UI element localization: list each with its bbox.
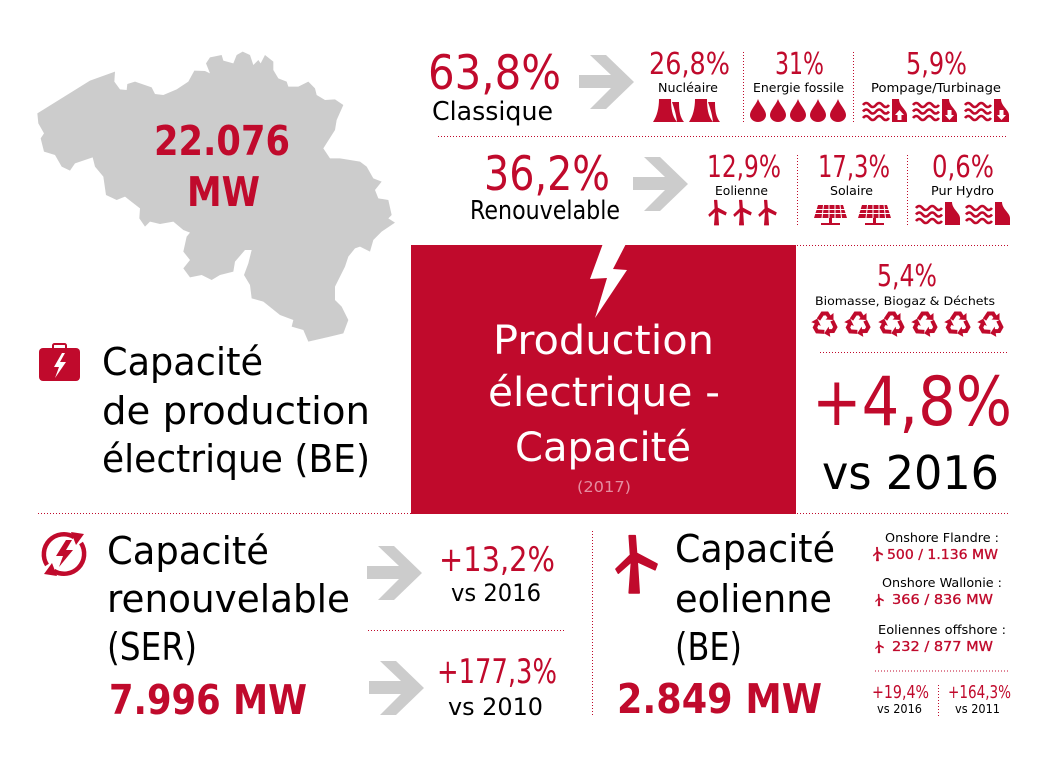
heading: capacité eolienne: eolienne (675, 577, 832, 621)
panel: title box (411, 238, 796, 514)
panel: classique row: 31% (775, 47, 824, 82)
map of Belgium: 22.076 (154, 117, 290, 165)
panel: wind breakdown: Eoliennes offshore : (878, 622, 1006, 637)
icon: briefcase (39, 344, 80, 381)
panel: wind breakdown: 500 / 1.136 MW (887, 547, 998, 563)
panel: wind breakdown: 366 / 836 MW (892, 592, 993, 608)
heading: capacité eolienne (617, 527, 835, 723)
panel: classique row: 26,8% (649, 47, 730, 82)
panel: renouvelable row: 12,9% (707, 150, 781, 185)
heading: capacité renouvelable: Capacité (107, 529, 269, 573)
panel: classique row (428, 46, 1009, 127)
panel: wind breakdown: Onshore Wallonie : (882, 575, 1002, 590)
panel: renouvelable row (470, 147, 1010, 226)
panel: +13,2% and +177,3% growth: +177,3% (437, 652, 557, 692)
panel: classique row: 63,8% (428, 46, 561, 101)
panel: wind breakdown (872, 530, 1011, 717)
callout: +4,8% vs 2016 (812, 363, 1012, 500)
panel: wind breakdown: vs 2016 (877, 701, 922, 716)
panel: classique row: 5,9% (906, 47, 967, 82)
panel: classique row: Classique (432, 97, 553, 127)
panel: wind breakdown: +19,4% (872, 682, 929, 703)
heading: capacité renouvelable (107, 529, 350, 724)
panel: biomasse: 5,4% (877, 259, 937, 294)
heading: capacité eolienne: Capacité (675, 527, 835, 571)
panel: title box: électrique - (488, 370, 720, 416)
panel: renouvelable row: Eolienne (715, 184, 768, 198)
panel: +13,2% and +177,3% growth (367, 540, 565, 721)
panel: renouvelable row: 17,3% (818, 150, 890, 185)
panel: classique row: Pompage/Turbinage (871, 81, 1001, 95)
panel: +13,2% and +177,3% growth: +13,2% (439, 540, 555, 580)
panel: title box: Production (493, 318, 714, 364)
panel: classique row: Energie fossile (753, 81, 844, 95)
callout: +4,8% vs 2016: vs 2016 (822, 446, 999, 500)
heading: capacité renouvelable: (SER) (107, 625, 197, 669)
heading: capacité eolienne: 2.849 MW (617, 675, 822, 723)
panel: biomasse: Biomasse, Biogaz & Déchets (815, 294, 995, 308)
panel: renouvelable row: Renouvelable (470, 196, 620, 226)
panel: wind breakdown: vs 2011 (955, 701, 1000, 716)
panel: renouvelable row: 0,6% (932, 150, 994, 185)
icon: renewable cycle (44, 532, 84, 576)
panel: +13,2% and +177,3% growth: vs 2010 (448, 693, 543, 721)
panel: wind breakdown: Onshore Flandre : (885, 530, 999, 545)
panel: classique row: Nucléaire (658, 81, 718, 95)
panel: title box: (2017) (577, 478, 631, 496)
panel: renouvelable row: Pur Hydro (931, 184, 994, 198)
heading: capacité renouvelable: renouvelable (107, 577, 350, 621)
icon: wind turbine (615, 534, 658, 594)
panel: biomasse (811, 259, 1004, 337)
map of Belgium: MW (187, 168, 260, 216)
heading: capacité eolienne: (BE) (675, 625, 742, 669)
heading: capacité de production électrique: Capacité (102, 340, 263, 384)
panel: wind breakdown: 232 / 877 MW (892, 639, 993, 655)
heading: capacité de production électrique: électrique (BE) (102, 437, 370, 481)
heading: capacité renouvelable: 7.996 MW (109, 676, 307, 724)
panel: +13,2% and +177,3% growth: vs 2016 (451, 579, 541, 607)
heading: capacité de production électrique: de production (102, 389, 370, 433)
callout: +4,8% vs 2016: +4,8% (812, 363, 1012, 442)
panel: wind breakdown: +164,3% (948, 682, 1011, 703)
panel: renouvelable row: 36,2% (484, 147, 610, 202)
map of Belgium (37, 52, 395, 342)
panel: title box: Capacité (515, 425, 691, 471)
panel: renouvelable row: Solaire (830, 184, 873, 198)
heading: capacité de production électrique (102, 340, 370, 481)
